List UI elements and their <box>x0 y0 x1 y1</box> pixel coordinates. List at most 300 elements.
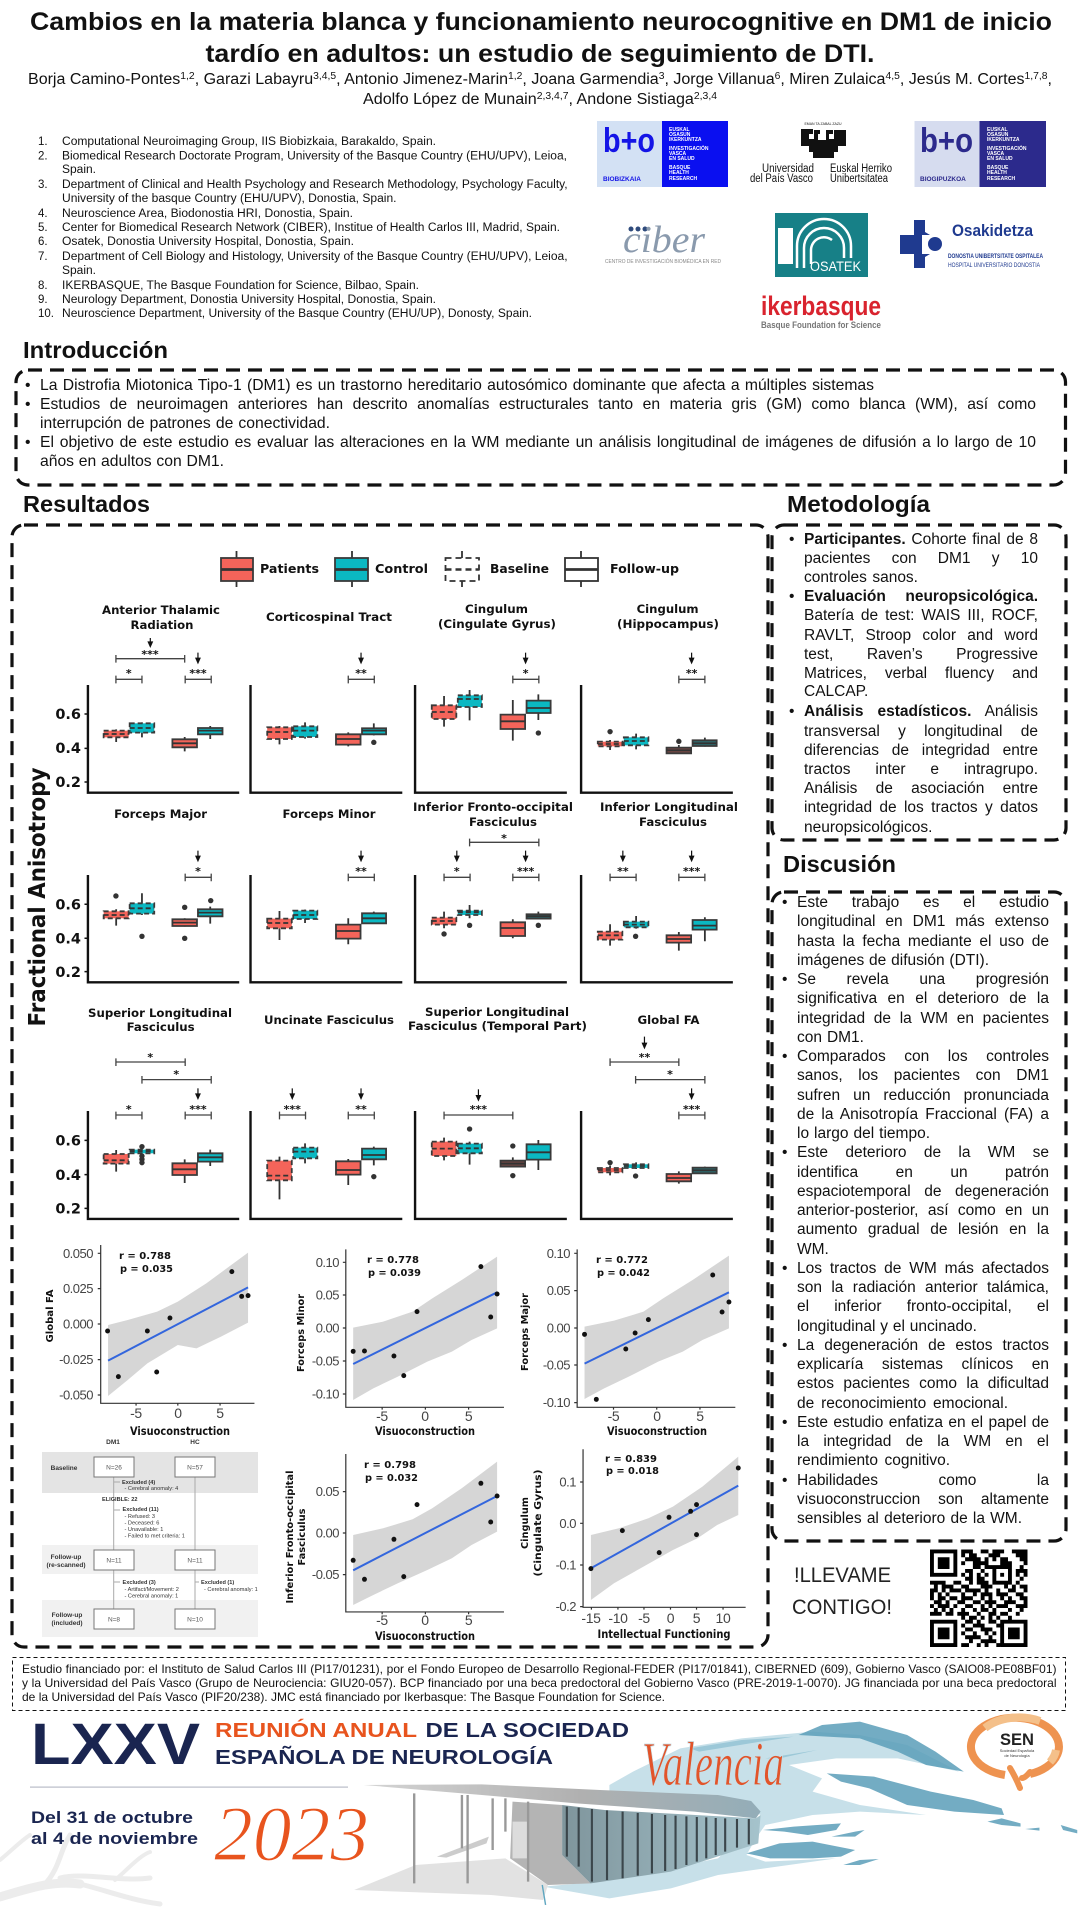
boxplot: Superior Longitudinal Fasciculus: Fasciculus <box>127 1020 195 1034</box>
scatter: Cingulum (Cingulate Gyrus) vs Intellectual Functioning: r = 0.839 <box>605 1454 657 1465</box>
flow diagram: participants: - Artifact/Movement: 2 <box>124 1587 179 1593</box>
affiliations list: Department of Cell Biology and Histology, University of the Basque Country (EHU/UPV), Leioa, <box>62 251 568 263</box>
text: discusión bullets: WM. <box>797 1240 829 1258</box>
scatter: Global FA vs Visuoconstruction: r = 0.788 <box>119 1251 171 1262</box>
boxplot: Inferior Fronto-occipital Fasciculus <box>413 800 573 982</box>
boxplot: Corticospinal Tract: Corticospinal Tract <box>266 610 392 624</box>
text: discusión bullets: son la radiación anterior talámica, <box>797 1279 1049 1296</box>
boxplot: Superior Longitudinal Fasciculus (Temporal Part): *** <box>470 1103 487 1116</box>
logo: Universidad del País Vasco: Universidad <box>762 163 814 175</box>
logo: Biobizkaia: RESEARCH <box>669 176 697 182</box>
scatter: Cingulum (Cingulate Gyrus) vs Intellectual Functioning: -0.2 <box>556 1599 576 1614</box>
logo: Osakidetza <box>900 220 1044 269</box>
title <box>30 8 1052 68</box>
text: discusión bullets: lo largo del tiempo. <box>797 1125 930 1142</box>
flow diagram: participants: N=8 <box>108 1616 120 1624</box>
scatter: Global FA vs Visuoconstruction: -5 <box>130 1405 142 1421</box>
scatter: Inferior Fronto-occipital Fasciculus vs Visuoconstruction: 0 <box>421 1612 429 1628</box>
text: discusión bullets: la integridad de la WM en el <box>797 1433 1049 1450</box>
scatter: Global FA vs Visuoconstruction: Visuoconstruction <box>130 1424 230 1438</box>
boxplot: Forceps Major: Forceps Major <box>114 807 207 821</box>
text: introducción bullets <box>25 377 1036 470</box>
scatter: Forceps Major vs Visuoconstruction: 0.05 <box>547 1283 570 1298</box>
logo: Biogipuzkoa: b+o <box>920 122 973 160</box>
logo: Universidad del País Vasco: Unibertsitatea <box>830 173 888 185</box>
scatter: Cingulum (Cingulate Gyrus) vs Intellectual Functioning: -10 <box>608 1610 628 1626</box>
boxplot: Uncinate Fasciculus: *** <box>284 1103 301 1116</box>
logo: ciber <box>605 219 721 265</box>
boxplot: Anterior Thalamic Radiation: *** <box>189 667 207 680</box>
text: metodología bullets <box>789 531 1038 836</box>
scatter: Cingulum (Cingulate Gyrus) vs Intellectual Functioning: Intellectual Functioning <box>598 1627 730 1641</box>
scatter: Global FA vs Visuoconstruction: 0 <box>174 1405 182 1421</box>
logo: Biogipuzkoa <box>914 121 1046 187</box>
banner: LXXV title: ESPAÑOLA DE NEUROLOGÍA <box>215 1746 553 1769</box>
banner: dates: Del 31 de octubre <box>31 1808 193 1827</box>
scatter: Forceps Major vs Visuoconstruction: Visuoconstruction <box>607 1424 707 1438</box>
text: discusión bullets: • <box>782 1337 787 1354</box>
logo: Biogipuzkoa: IKERKUNTZA <box>987 137 1020 143</box>
banner: decorative gray vein <box>0 1835 160 1904</box>
logo: Biogipuzkoa: EUSKAL <box>987 127 1008 133</box>
boxplot: Anterior Thalamic Radiation: Anterior Thalamic <box>102 603 220 617</box>
boxplot: Uncinate Fasciculus <box>251 1013 402 1219</box>
scatter: Cingulum (Cingulate Gyrus) vs Intellectual Functioning: p = 0.018 <box>606 1466 659 1477</box>
text: metodología bullets: • <box>789 588 794 605</box>
scatter: Inferior Fronto-occipital Fasciculus vs Visuoconstruction: p = 0.032 <box>365 1473 418 1484</box>
banner: watercolor and building illustration <box>354 1722 1077 1905</box>
boxplot: Inferior Fronto-occipital Fasciculus: *** <box>517 865 534 878</box>
affiliations list: University of the basque Country (EHU/UPV), Donostia, Spain. <box>62 193 396 205</box>
boxplot: Superior Longitudinal Fasciculus: Superior Longitudinal <box>88 1006 232 1020</box>
authors: 1,2 <box>180 71 195 82</box>
logo: SEN <box>971 1717 1059 1788</box>
flow diagram: participants: Excluded (4) <box>122 1480 155 1486</box>
text: metodología bullets: • <box>789 703 794 720</box>
banner: dates: al 4 de noviembre <box>31 1829 198 1848</box>
logo: Osatek: OSATEK <box>810 258 862 274</box>
affiliations list: Computational Neuroimaging Group, IIS Biobizkaia, Barakaldo, Spain. <box>62 136 436 148</box>
flow diagram: participants: - Deceased: 6 <box>124 1520 159 1526</box>
authors: 1,7,8 <box>1025 71 1048 82</box>
scatter: Inferior Fronto-occipital Fasciculus vs Visuoconstruction: -5 <box>376 1612 388 1628</box>
affiliations list: Spain. <box>62 265 96 277</box>
flow diagram: participants: - Cerebral anomaly: 1 <box>124 1594 178 1600</box>
logo: Osatek <box>775 213 868 277</box>
text: introducción bullets: La Distrofia Miotonica Tipo-1 (DM1) es un trastorno hereditario autosómico dominante que afecta a múltiples sistemas <box>40 377 874 394</box>
text: metodología bullets: Análisis de asociación entre <box>804 780 1038 797</box>
text: introducción bullets: Estudios de neuroimagen anteriores han descrito anomalías estructurales tanto en materia gris (GM) como blanca (WM), así como <box>40 396 1036 413</box>
boxplot: Cingulum (Cingulate Gyrus): * <box>523 667 529 680</box>
scatter: Cingulum (Cingulate Gyrus) vs Intellectual Functioning: 0 <box>667 1610 675 1626</box>
logo: SEN: Sociedad Española <box>1000 1748 1035 1753</box>
text: discusión bullets: el inferior fronto-occipital, el <box>797 1298 1049 1315</box>
logo: Biogipuzkoa: INVESTIGACIÓN <box>987 144 1027 152</box>
text: introducción bullets: años en adultos con DM1. <box>40 453 224 470</box>
scatter: Global FA vs Visuoconstruction: p = 0.035 <box>120 1264 173 1275</box>
heading: Resultados: Resultados <box>23 491 150 517</box>
boxplot: Inferior Fronto-occipital Fasciculus: * <box>454 865 460 878</box>
text: metodología bullets: test, Raven’s Progressive <box>804 646 1038 663</box>
text: discusión bullets <box>782 894 1049 1527</box>
boxplot: Corticospinal Tract <box>251 610 402 793</box>
boxplot: Cingulum (Cingulate Gyrus): (Cingulate Gyrus) <box>438 617 556 631</box>
panel: funding frame <box>12 1658 1066 1710</box>
text: discusión bullets: Este deterioro de la WM se <box>797 1144 1049 1161</box>
scatter: Forceps Minor vs Visuoconstruction: 0.00 <box>316 1320 339 1336</box>
text: introducción bullets: • <box>25 434 30 451</box>
flow diagram: participants: (re-scanned) <box>46 1562 86 1569</box>
text: discusión bullets: • <box>782 1472 787 1488</box>
text: funding acknowledgements: de la Universidad del País Vasco (PIF20/238). JMC está financiado por Ikerbasque: The Basque Foundation for Science. <box>22 1690 665 1704</box>
text: discusión bullets: longitudinal en DM1 más extenso <box>797 913 1049 930</box>
tick labels row 1: 0.4 <box>55 741 81 757</box>
affiliations list: 10. <box>38 308 54 320</box>
scatter: Cingulum (Cingulate Gyrus) vs Intellectual Functioning: 0.1 <box>559 1474 576 1490</box>
text: discusión bullets: rendimiento cognitivo. <box>797 1452 950 1469</box>
affiliations list: Osatek, Donostia University Hospital, Donostia, Spain. <box>62 236 354 248</box>
boxplot: Superior Longitudinal Fasciculus: * <box>147 1051 153 1064</box>
text: metodología bullets: CALCAP. <box>804 683 868 700</box>
logo: Universidad del País Vasco: EMAN TA ZABAL ZAZU <box>804 122 842 126</box>
boxplot: Inferior Longitudinal Fasciculus: Fasciculus <box>639 815 707 829</box>
text: discusión bullets: • <box>782 894 787 911</box>
banner: LXXV title <box>31 1712 629 1777</box>
flow diagram: participants: Excluded (11) <box>122 1507 159 1513</box>
text: discusión bullets: significativa en el deterioro de la <box>797 990 1049 1007</box>
boxplot: Global FA: *** <box>683 1103 700 1116</box>
text: discusión bullets: • <box>782 971 787 988</box>
scatter: Inferior Fronto-occipital Fasciculus vs Visuoconstruction: Visuoconstruction <box>375 1629 475 1643</box>
boxplot: Forceps Major <box>84 807 239 982</box>
authors: , Garazi Labayru <box>195 71 313 88</box>
logo: Biogipuzkoa: VASCA <box>987 151 1005 157</box>
affiliations list: 5. <box>38 222 48 234</box>
text: discusión bullets: sensibles al deterioro de la WM. <box>797 1510 1022 1527</box>
tick labels row 1: 0.2 <box>55 775 81 791</box>
boxplot: Inferior Longitudinal Fasciculus <box>581 800 738 982</box>
heading: Metodología: Metodología <box>787 491 931 517</box>
scatter: Forceps Minor vs Visuoconstruction: -0.05 <box>312 1354 339 1368</box>
scatter: Cingulum (Cingulate Gyrus) vs Intellectual Functioning: Cingulum <box>520 1497 531 1549</box>
text: introducción bullets: El objetivo de este estudio es evaluar las alteraciones en la WM mediante un análisis longitudinal de imágenes de difusión a lo largo de 10 <box>40 434 1036 451</box>
scatter: Forceps Minor vs Visuoconstruction: -5 <box>376 1408 388 1424</box>
scatter: Forceps Minor vs Visuoconstruction: 0.10 <box>316 1255 339 1270</box>
scatter: Cingulum (Cingulate Gyrus) vs Intellectual Functioning: -0.1 <box>556 1558 576 1572</box>
authors: , Andone Sistiaga <box>569 91 694 108</box>
logo: SEN: de Neurología <box>1004 1753 1030 1758</box>
text: metodología bullets: neuropsicológicos. <box>804 819 932 836</box>
banner: LXXV title: DE LA SOCIEDAD <box>426 1720 629 1742</box>
scatter: Forceps Major vs Visuoconstruction: r = 0.772 <box>596 1255 648 1266</box>
chart legend: Control <box>375 562 428 576</box>
boxplot: Uncinate Fasciculus: ** <box>355 1103 367 1116</box>
text: discusión bullets: explicaría sistemas clínicos en <box>797 1356 1049 1373</box>
boxplot: Anterior Thalamic Radiation: *** <box>141 648 159 661</box>
text: funding acknowledgements: Estudio financiado por: el Instituto de Salud Carlos III (PI17/01231), por el Fondo Europeo de Desarrollo Regional-FEDER (PI17/01841), CIBERNED (609), Gobierno Vasco (SAIO08-PE08BF01) <box>22 1662 1056 1676</box>
scatter: Forceps Minor vs Visuoconstruction: -0.10 <box>312 1386 339 1402</box>
scatter: Inferior Fronto-occipital Fasciculus vs Visuoconstruction: Fasciculus <box>297 1508 308 1566</box>
scatter: Cingulum (Cingulate Gyrus) vs Intellectual Functioning: (Cingulate Gyrus) <box>533 1470 544 1576</box>
scatter: Forceps Major vs Visuoconstruction: -5 <box>608 1408 620 1424</box>
text: discusión bullets: estos pacientes como la dificultad <box>797 1375 1049 1392</box>
boxplot: Uncinate Fasciculus: Uncinate Fasciculus <box>264 1013 394 1027</box>
authors: 6 <box>775 71 781 82</box>
scatter: Global FA vs Visuoconstruction: 0.025 <box>63 1281 93 1296</box>
scatter: Forceps Minor vs Visuoconstruction: 5 <box>465 1408 473 1424</box>
scatter: Forceps Minor vs Visuoconstruction: Visuoconstruction <box>375 1424 475 1438</box>
text: metodología bullets: Participantes. Cohorte final de 8 <box>804 531 1038 548</box>
scatter: Cingulum (Cingulate Gyrus) vs Intellectual Functioning: -5 <box>638 1610 650 1626</box>
scatter: Forceps Major vs Visuoconstruction: -0.10 <box>543 1395 570 1410</box>
text: discusión bullets: • <box>782 1048 787 1065</box>
text: discusión bullets: identifica en un patrón <box>797 1164 1049 1180</box>
boxplot: Superior Longitudinal Fasciculus: * <box>173 1068 179 1081</box>
logo: Biogipuzkoa: RESEARCH <box>987 176 1015 182</box>
scatter: Global FA vs Visuoconstruction: -0.025 <box>59 1352 93 1367</box>
tick labels row 3: 0.2 <box>55 1202 81 1218</box>
scatter: Forceps Major vs Visuoconstruction: p = 0.042 <box>597 1268 650 1279</box>
affiliations list: 8. <box>38 280 48 292</box>
boxplot: Global FA: ** <box>639 1051 650 1064</box>
panel: introducción frame <box>16 370 1066 485</box>
heading: Introducción: Introducción <box>23 337 168 363</box>
scatter: Forceps Major vs Visuoconstruction: 0 <box>653 1408 661 1424</box>
tick labels row 2: 0.2 <box>55 965 81 981</box>
logo: Biobizkaia: VASCA <box>669 151 687 157</box>
authors: , Jorge Villanua <box>664 71 775 88</box>
logo: Ikerbasque: Basque Foundation for Science <box>761 320 881 331</box>
affiliations list: Spain. <box>62 164 96 176</box>
logo: Osakidetza: DONOSTIA UNIBERTSITATE OSPITALEA <box>948 254 1044 260</box>
logo: Biobizkaia: BIOBIZKAIA <box>603 176 641 183</box>
tick labels row 3 <box>55 1134 81 1218</box>
boxplot: Cingulum (Hippocampus): ** <box>686 667 698 680</box>
scatter: Global FA vs Visuoconstruction: -0.050 <box>59 1388 93 1402</box>
logo: Biobizkaia: BASQUE <box>669 165 691 171</box>
scatter: Inferior Fronto-occipital Fasciculus vs Visuoconstruction: r = 0.798 <box>364 1460 416 1471</box>
panel: discusión frame <box>772 892 1066 1541</box>
logo: Universidad del País Vasco: Euskal Herriko <box>830 163 892 175</box>
title: Cambios en la materia blanca y funcionamiento neurocognitive en DM1 de inicio <box>30 8 1052 36</box>
affiliations list: Neurology Department, Donostia University Hospital, Donostia, Spain. <box>62 294 436 306</box>
text: discusión bullets: aumento gradual de lesión en la <box>797 1221 1049 1238</box>
boxplot: Superior Longitudinal Fasciculus (Temporal Part): Superior Longitudinal <box>425 1005 569 1019</box>
banner: separator line <box>30 1786 348 1788</box>
scatter: Forceps Minor vs Visuoconstruction: Forceps Minor <box>296 1294 307 1372</box>
authors: 3 <box>659 71 665 82</box>
panel: resultados frame <box>12 525 768 1647</box>
text: discusión bullets: Se revela una progresión <box>797 971 1049 988</box>
flow diagram: participants: Baseline <box>51 1465 78 1472</box>
scatter: Forceps Minor vs Visuoconstruction: 0.05 <box>316 1288 339 1302</box>
call to action: llévame contigo: !LLEVAME <box>794 1564 891 1587</box>
tick labels row 2 <box>55 898 81 981</box>
affiliations list: Neuroscience Department, University of the Basque Country (EHU/UP), Donosty, Spain. <box>62 308 532 320</box>
affiliations list: Neuroscience Area, Biodonostia HRI, Donostia, Spain. <box>62 208 353 220</box>
authors: 2,3,4,7 <box>537 91 569 102</box>
boxplot: Forceps Minor: Forceps Minor <box>282 807 376 821</box>
scatter: Cingulum (Cingulate Gyrus) vs Intellectual Functioning: 10 <box>716 1610 731 1626</box>
text: discusión bullets: • <box>782 1414 787 1431</box>
logo: Biogipuzkoa: EN SALUD <box>987 156 1013 162</box>
logo: ciber: ciber <box>623 219 705 261</box>
text: metodología bullets: Matrices, verbal fluency and <box>804 665 1038 682</box>
tick labels row 2: 0.4 <box>55 932 81 948</box>
text: metodología bullets: transversal y longitudinal de <box>804 723 1038 740</box>
text: discusión bullets: espaciotemporal de degeneración <box>797 1183 1049 1200</box>
logo: Universidad del País Vasco: del País Vasco <box>750 173 813 185</box>
boxplot: Global FA: * <box>667 1068 673 1081</box>
logo: Biogipuzkoa: BASQUE <box>987 165 1009 171</box>
text: metodología bullets: integridad de los tractos y datos <box>804 799 1038 816</box>
authors: 3,4,5 <box>313 71 337 82</box>
y axis title: Fractional Anisotropy: Fractional Anisotropy <box>25 768 51 1026</box>
flow diagram: participants: - Cerebral anomaly: 1 <box>204 1587 258 1593</box>
affiliations list: 2. <box>38 150 48 162</box>
scatter: Forceps Minor vs Visuoconstruction: p = 0.039 <box>368 1268 421 1279</box>
flow diagram: participants: Follow-up <box>51 1554 81 1561</box>
authors: , Joana Garmendia <box>522 71 659 88</box>
flow diagram: participants: Excluded (3) <box>122 1580 156 1586</box>
scatter: Inferior Fronto-occipital Fasciculus vs Visuoconstruction <box>285 1454 504 1643</box>
affiliations list: Biomedical Research Doctorate Program, University of the Basque Country (EHU/UPV), Leioa, <box>62 150 567 162</box>
flow diagram: participants: HC <box>190 1439 200 1446</box>
text: introducción bullets: • <box>25 396 30 413</box>
text: discusión bullets: • <box>782 1260 787 1277</box>
boxplot: Forceps Major: * <box>195 865 201 878</box>
panel: metodología frame <box>772 525 1066 840</box>
chart legend: Patients <box>260 562 319 576</box>
tick labels row 3: 0.6 <box>55 1134 81 1150</box>
text: discusión bullets: Este trabajo es el estudio <box>797 894 1049 911</box>
flow diagram: participants: DM1 <box>106 1439 120 1446</box>
logo: Biobizkaia: IKERKUNTZA <box>669 137 702 143</box>
flow diagram: participants: - Unavailable: 1 <box>124 1527 163 1533</box>
affiliations list: Center for Biomedical Research Network (CIBER), Institue of Health Carlos III, Madrid, Spain. <box>62 222 560 234</box>
logo: Ikerbasque: ikerbasque <box>761 291 881 321</box>
text: funding acknowledgements: y la Universidad del País Vasco (Grupo de Neurociencia: GIU20-057). BCP financiado por una beca predoctoral del Gobierno Vasco (PRE-2019-1-0070). JG financiada por una beca predoctoral <box>22 1676 1056 1690</box>
affiliations list <box>38 136 568 320</box>
scatter: Forceps Major vs Visuoconstruction: 5 <box>696 1408 704 1424</box>
text: discusión bullets: Comparados con los controles <box>797 1048 1049 1065</box>
scatter: Inferior Fronto-occipital Fasciculus vs Visuoconstruction: 0.00 <box>316 1526 339 1540</box>
banner: Valencia: Valencia <box>642 1731 784 1799</box>
logo: Osakidetza: HOSPITAL UNIVERSITARIO DONOSTIA <box>948 263 1040 269</box>
scatter: Global FA vs Visuoconstruction: 5 <box>216 1405 224 1421</box>
title: tardío en adultos: un estudio de seguimiento de DTI. <box>206 40 874 68</box>
authors: 2,3,4 <box>694 91 717 102</box>
text: discusión bullets: de la Anisotropía Fraccional (FA) a <box>797 1106 1049 1123</box>
affiliations list: IKERBASQUE, The Basque Foundation for Science, Bilbao, Spain. <box>62 280 419 292</box>
logo: Universidad del País Vasco <box>750 122 892 185</box>
authors: Borja Camino-Pontes <box>28 71 175 88</box>
boxplot: Inferior Longitudinal Fasciculus: ** <box>617 865 629 878</box>
banner: LXXV title: REUNIÓN ANUAL <box>215 1718 417 1742</box>
text: discusión bullets: sanos, los pacientes con DM1 <box>797 1067 1049 1084</box>
boxplot: Superior Longitudinal Fasciculus: *** <box>189 1103 207 1116</box>
scatter: Forceps Major vs Visuoconstruction: -0.05 <box>543 1358 570 1372</box>
banner: dates <box>31 1808 198 1848</box>
icon: QR code <box>930 1551 1028 1645</box>
flow diagram: participants: Excluded (1) <box>201 1580 234 1586</box>
scatter: Forceps Major vs Visuoconstruction: Forceps Major <box>520 1293 531 1371</box>
text: metodología bullets: pacientes con DM1 y 10 <box>804 550 1038 567</box>
text: discusión bullets: longitudinal y el uncinado. <box>797 1318 977 1334</box>
authors: , Miren Zulaica <box>780 71 886 88</box>
boxplot: Inferior Longitudinal Fasciculus: Inferior Longitudinal <box>600 800 738 814</box>
boxplot: Inferior Longitudinal Fasciculus: *** <box>683 865 700 878</box>
logo: Biobizkaia: INVESTIGACIÓN <box>669 144 709 152</box>
logo: Biobizkaia: HEALTH <box>669 170 689 176</box>
scatter: Inferior Fronto-occipital Fasciculus vs Visuoconstruction: 0.05 <box>316 1484 339 1499</box>
scatter: Forceps Major vs Visuoconstruction: 0.10 <box>547 1246 570 1261</box>
boxplot: Anterior Thalamic Radiation: * <box>126 667 132 680</box>
logo: Biobizkaia: OSASUN <box>669 132 691 138</box>
flow diagram: participants: - Cerebral anomaly: 4 <box>124 1486 178 1492</box>
scatter: Global FA vs Visuoconstruction: 0.000 <box>63 1316 93 1332</box>
affiliations list: 4. <box>38 208 48 220</box>
flow diagram: participants: N=57 <box>187 1464 203 1472</box>
text: metodología bullets: • <box>789 531 794 548</box>
text: metodología bullets: RAVLT, Stroop color and word <box>804 627 1038 644</box>
affiliations list: Department of Clinical and Health Psychology and Research Methodology, Psychology Faculty, <box>62 179 568 191</box>
scatter: Forceps Minor vs Visuoconstruction <box>296 1249 504 1438</box>
logo: SEN: SEN <box>1000 1730 1034 1749</box>
scatter: Forceps Major vs Visuoconstruction <box>520 1246 735 1438</box>
affiliations list: 9. <box>38 294 48 306</box>
flow diagram: participants: (included) <box>51 1620 83 1627</box>
boxplot: Corticospinal Tract: ** <box>355 667 367 680</box>
call to action: llévame contigo <box>792 1564 892 1619</box>
text: discusión bullets: con DM1. <box>797 1029 864 1046</box>
scatter: Forceps Major vs Visuoconstruction: 0.00 <box>547 1320 570 1336</box>
boxplot: Forceps Minor <box>251 807 402 982</box>
authors <box>28 71 1052 108</box>
banner: LXXV title: LXXV <box>31 1712 200 1777</box>
text: metodología bullets: Análisis estadísticos. Análisis <box>804 703 1038 720</box>
tick labels row 2: 0.6 <box>55 898 81 914</box>
text: funding acknowledgements <box>22 1662 1056 1704</box>
text: metodología bullets: Evaluación neuropsicológica. <box>804 588 1038 605</box>
scatter: Cingulum (Cingulate Gyrus) vs Intellectual Functioning <box>520 1449 746 1641</box>
boxplot: Cingulum (Hippocampus): (Hippocampus) <box>617 617 719 631</box>
text: metodología bullets: diferencias de integridad entre <box>804 742 1038 759</box>
text: discusión bullets: La degeneración de estos tractos <box>797 1337 1049 1354</box>
logo: Biogipuzkoa: HEALTH <box>987 170 1007 176</box>
scatter: Global FA vs Visuoconstruction <box>45 1245 254 1438</box>
authors: , Antonio Jimenez-Marin <box>336 71 508 88</box>
logo: Biogipuzkoa: OSASUN <box>987 132 1009 138</box>
authors: , Jesús M. Cortes <box>900 71 1025 88</box>
text: discusión bullets: de reconocimiento emocional. <box>797 1394 1008 1412</box>
flow diagram: participants <box>42 1439 258 1637</box>
boxplot: Global FA: Global FA <box>638 1013 700 1027</box>
logo: Biobizkaia: b+o <box>603 122 655 160</box>
text: introducción bullets: interrupción de patrones de conectividad. <box>40 415 330 432</box>
text: discusión bullets: • <box>782 1144 787 1161</box>
text: discusión bullets: sufren un reducción pronunciada <box>797 1086 1049 1104</box>
text: metodología bullets: Batería de test: WAIS III, ROCF, <box>804 607 1038 624</box>
banner: year 2023: 2023 <box>214 1790 369 1877</box>
text: discusión bullets: visuoconstruccion son altamente <box>797 1491 1049 1508</box>
boxplot: Cingulum (Cingulate Gyrus): Cingulum <box>465 602 528 616</box>
scatter: Cingulum (Cingulate Gyrus) vs Intellectual Functioning: -15 <box>581 1610 601 1626</box>
flow diagram: participants: - Refused: 3 <box>124 1514 155 1520</box>
text: discusión bullets: Este estudio enfatiza en el papel de <box>797 1414 1049 1431</box>
flow diagram: participants: Follow-up <box>52 1612 82 1619</box>
affiliations list: 6. <box>38 236 48 248</box>
